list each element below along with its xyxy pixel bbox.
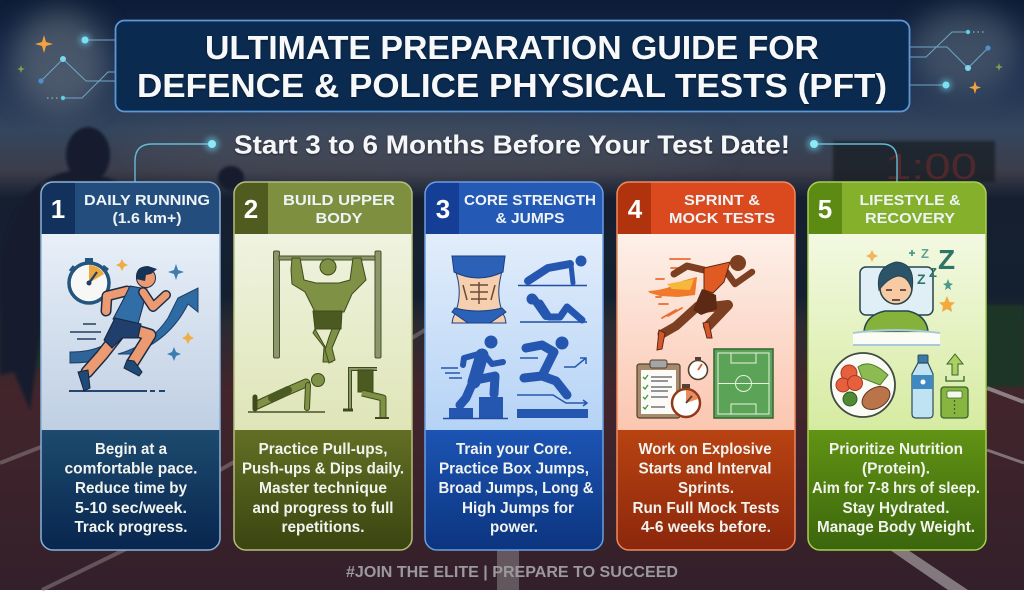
- subtitle with connectors: Start 3 to 6 Months Before Your Test Date!: [234, 130, 790, 160]
- heading: lifestyle and recovery: LIFESTYLE &: [860, 192, 961, 209]
- number 4: 4: [628, 194, 643, 224]
- heading: sprint and mock tests: SPRINT &: [684, 192, 760, 209]
- icon: runner with stopwatch and arrow: [69, 258, 198, 391]
- heading: core strength and jumps: & JUMPS: [496, 210, 564, 227]
- title banner: DEFENCE & POLICE PHYSICAL TESTS (PFT): [137, 67, 887, 104]
- subtitle with connectors: [135, 130, 897, 182]
- icon: box jump figure: [441, 336, 508, 418]
- text: step 2 description: Master technique: [259, 480, 387, 497]
- icon: sleep z letters and stars: [917, 244, 955, 312]
- scoreboard: 1:00: [885, 146, 977, 187]
- text: step 4 description: Work on Explosive: [638, 441, 772, 458]
- text: step 1 description: Begin at a: [95, 441, 167, 458]
- icon: weight scale with arrow: [941, 354, 968, 418]
- icon: orange sparkle left: [17, 35, 53, 73]
- heading: lifestyle and recovery: RECOVERY: [865, 210, 955, 227]
- connector lines: left circuit: [38, 34, 115, 100]
- icon: stopwatches: [672, 357, 708, 417]
- connector lines: right circuit: [909, 30, 991, 91]
- icon: sleep z letters and stars: Z: [917, 271, 926, 287]
- panel: step 3 core strength and jumps: [425, 182, 603, 550]
- text: step 2 description: repetitions.: [282, 519, 364, 536]
- text: step 4 description: 4-6 weeks before.: [641, 519, 771, 536]
- icon: plank and sit-up figures: [518, 256, 587, 322]
- text: step 3 description: Practice Box Jumps,: [439, 460, 589, 478]
- icon: orange sparkle right: [969, 63, 1003, 94]
- text: step 5 description: Stay Hydrated.: [842, 500, 950, 517]
- text: step 5 description: [812, 441, 980, 536]
- footer tagline: #JOIN THE ELITE | PREPARE TO SUCCEED: [346, 564, 678, 581]
- panel: step 4 sprint and mock tests: [617, 182, 795, 550]
- heading: core strength and jumps: CORE STRENGTH: [464, 192, 596, 209]
- icon: sports field: [714, 349, 773, 418]
- heading: lifestyle and recovery: [860, 192, 961, 227]
- icon: push-up and dips figures: [248, 369, 389, 418]
- title banner: [116, 20, 910, 112]
- heading: sprint and mock tests: MOCK TESTS: [669, 210, 775, 227]
- text: step 3 description: Train your Core.: [456, 441, 572, 458]
- text: step 5 description: Aim for 7-8 hrs of sleep.: [812, 480, 980, 497]
- heading: core strength and jumps: [464, 192, 596, 227]
- text: step 5 description: Manage Body Weight.: [817, 519, 975, 536]
- icon: sleeping person: [853, 250, 940, 345]
- text: step 3 description: power.: [490, 519, 538, 536]
- text: step 2 description: Push-ups & Dips daily.: [242, 460, 404, 478]
- text: step 2 description: Practice Pull-ups,: [258, 441, 388, 458]
- icon: abdominal torso: [452, 256, 506, 323]
- text: step 1 description: [64, 441, 198, 536]
- heading: daily running: (1.6 km+): [112, 210, 182, 227]
- icon: sleep z letters and stars: Z: [921, 246, 929, 261]
- text: step 3 description: Broad Jumps, Long &: [438, 480, 594, 497]
- text: step 2 description: and progress to full: [252, 500, 394, 517]
- panel: step 1 daily running: [41, 182, 220, 550]
- heading: daily running: [84, 192, 210, 227]
- text: step 3 description: High Jumps for: [462, 500, 574, 517]
- text: step 1 description: 5-10 sec/week.: [75, 500, 187, 517]
- text: step 4 description: [632, 441, 780, 536]
- text: step 3 description: [438, 441, 594, 536]
- heading: build upper body: BUILD UPPER: [283, 192, 395, 209]
- scoreboard: [833, 141, 995, 187]
- icon: water bottle: [912, 355, 933, 418]
- icon: sprinter with flames: [648, 255, 752, 350]
- icon: clipboard checklist: [637, 360, 680, 418]
- title banner: ULTIMATE PREPARATION GUIDE FOR: [205, 29, 819, 66]
- icon: healthy food plate: [831, 353, 895, 417]
- silhouette: athlete in background: [0, 127, 244, 410]
- icon: sleep z letters and stars: Z: [938, 244, 955, 275]
- text: step 1 description: Reduce time by: [75, 480, 187, 497]
- icon: pull-up bar figure: [274, 251, 381, 363]
- heading: daily running: DAILY RUNNING: [84, 192, 210, 209]
- heading: build upper body: [283, 192, 395, 227]
- text: step 5 description: (Protein).: [862, 460, 930, 478]
- text: step 4 description: Starts and Interval: [638, 460, 772, 478]
- number 5: 5: [818, 194, 832, 224]
- number 1: 1: [51, 194, 65, 224]
- icon: broad jump figure: [517, 336, 588, 418]
- heading: build upper body: BODY: [316, 210, 362, 227]
- number 3: 3: [436, 194, 450, 224]
- icon: sleep z letters and stars: Z: [929, 265, 937, 280]
- text: step 1 description: Track progress.: [74, 519, 188, 536]
- panel: step 5 lifestyle and recovery: [808, 182, 986, 550]
- text: step 4 description: Sprints.: [678, 480, 734, 497]
- text: step 4 description: Run Full Mock Tests: [632, 500, 780, 517]
- text: step 1 description: comfortable pace.: [64, 460, 198, 478]
- text: step 2 description: [242, 441, 404, 536]
- heading: sprint and mock tests: [669, 192, 775, 227]
- number 2: 2: [244, 194, 258, 224]
- panel: step 2 build upper body: [234, 182, 412, 550]
- text: step 5 description: Prioritize Nutrition: [829, 441, 963, 458]
